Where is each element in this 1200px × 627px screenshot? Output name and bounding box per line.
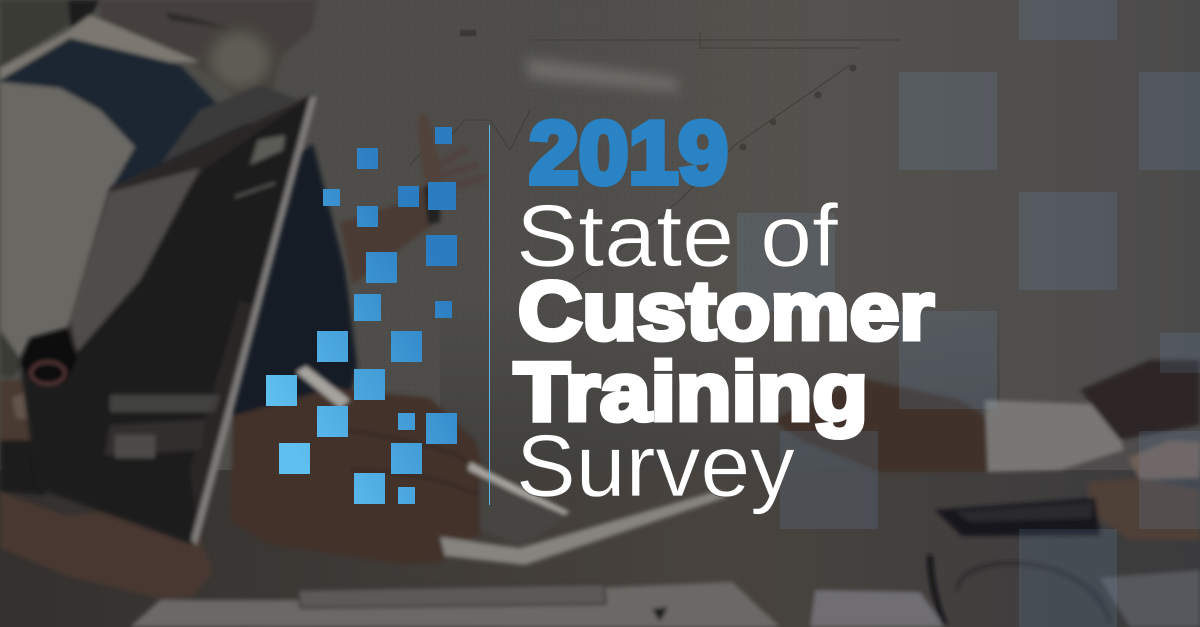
line: Customer: Customer xyxy=(518,264,934,357)
line: Survey: Survey xyxy=(516,416,795,515)
vertical divider xyxy=(489,125,490,505)
wall chart sketch xyxy=(410,30,900,300)
blurred wall highlight xyxy=(525,58,680,92)
title xyxy=(514,103,934,515)
line: Training: Training xyxy=(514,345,868,438)
logo: scattered blue squares xyxy=(266,127,457,504)
line: State of: State of xyxy=(516,186,839,285)
translucent background squares xyxy=(737,0,1200,627)
laptop xyxy=(20,94,317,546)
year: 2019 xyxy=(529,103,728,202)
